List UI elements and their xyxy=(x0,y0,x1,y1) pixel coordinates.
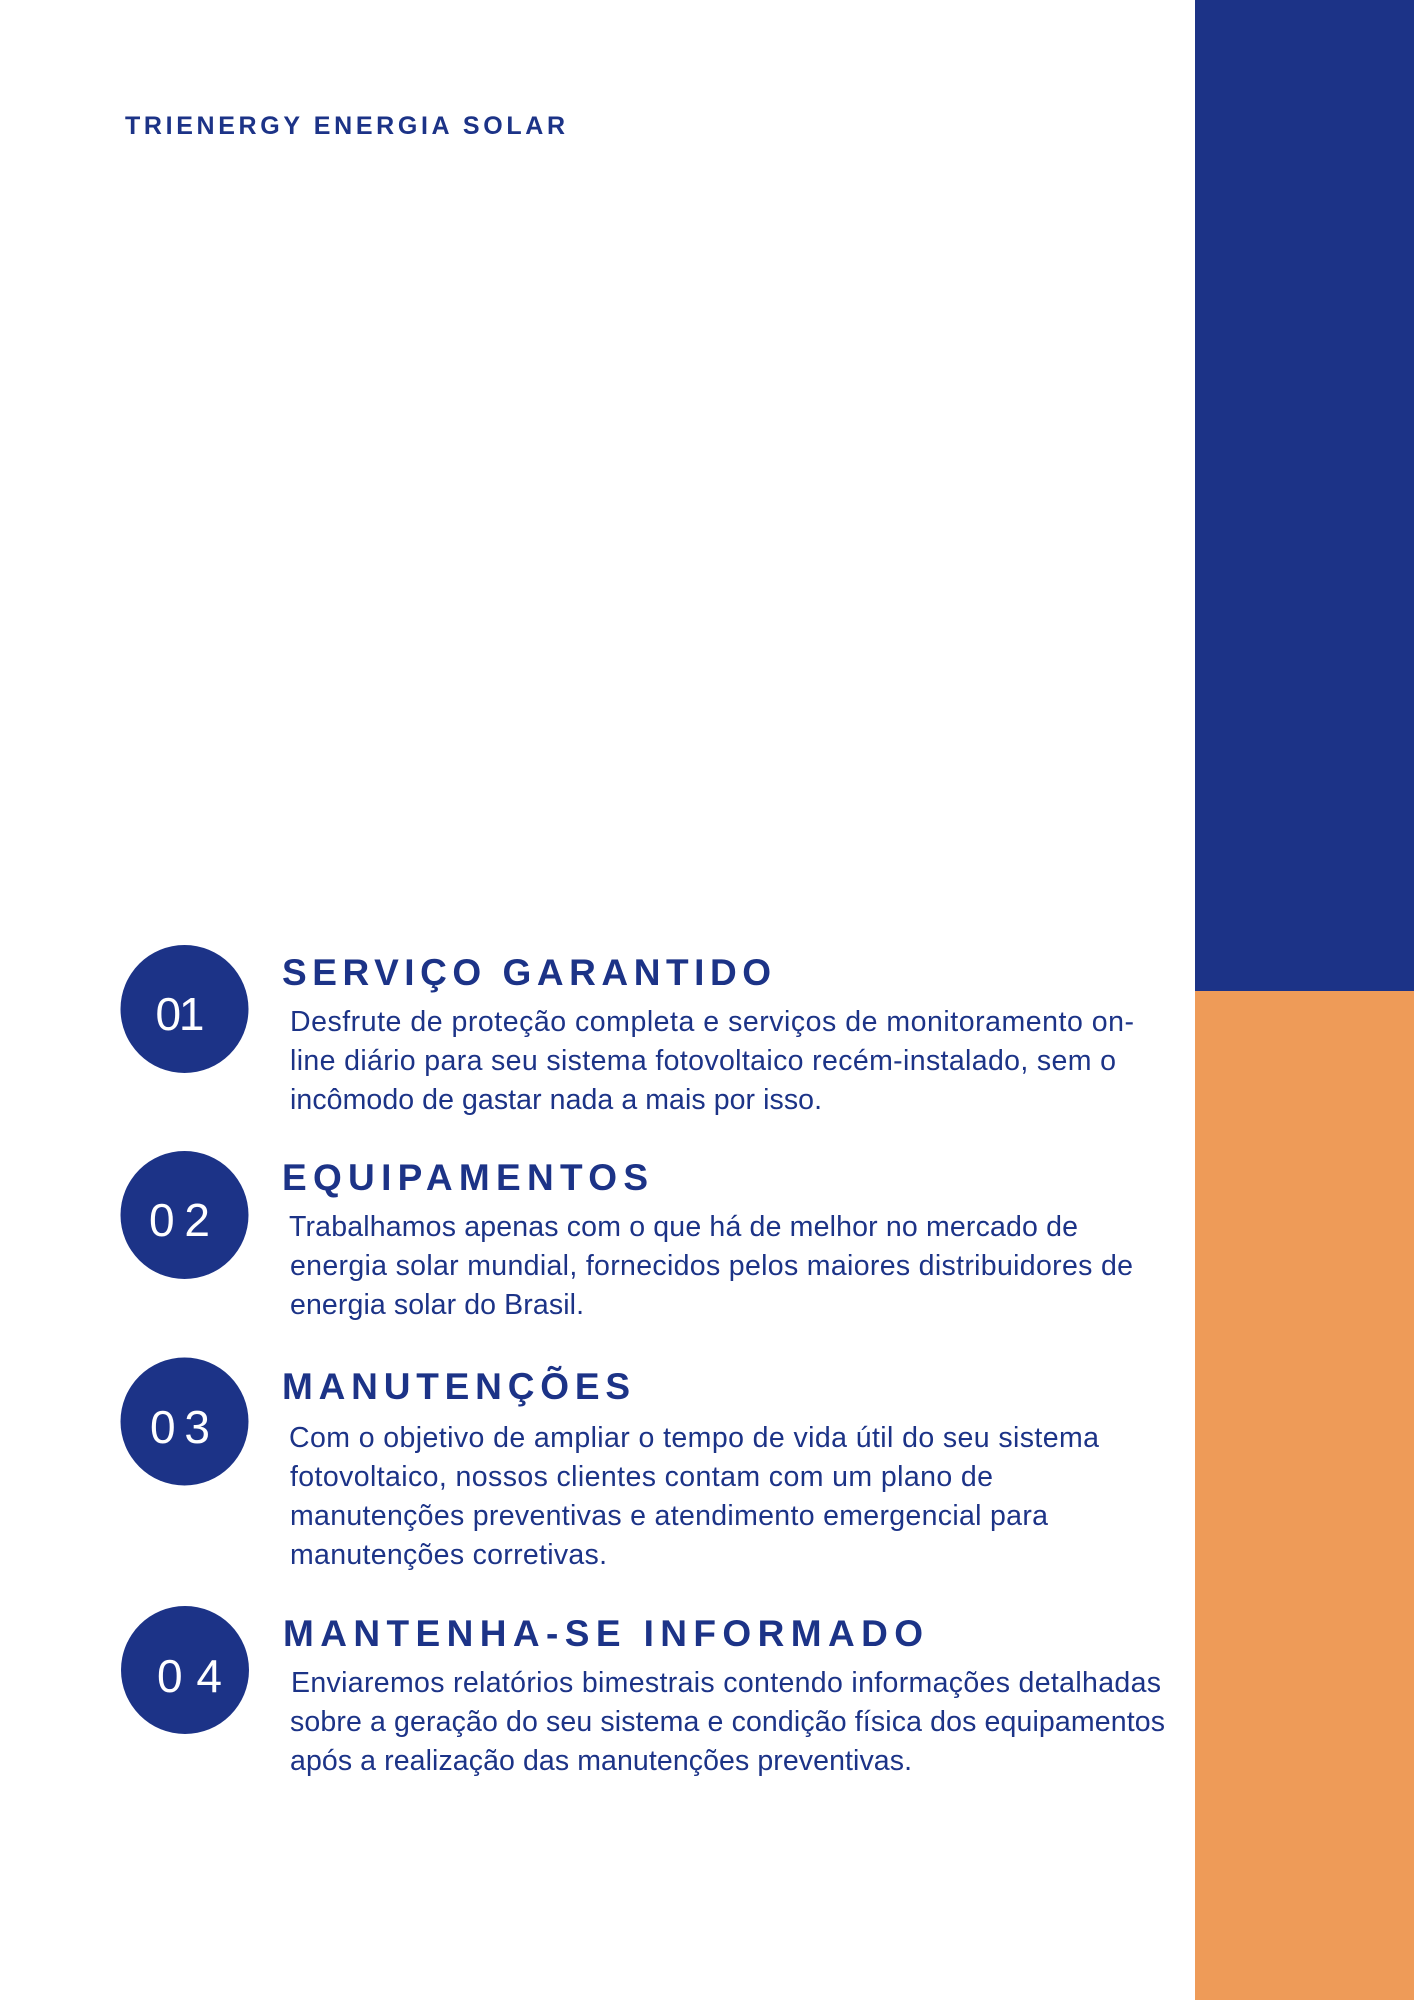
text block: item 02 description xyxy=(289,1211,1133,1321)
panel: item 04 xyxy=(121,1606,1165,1777)
text block: item 03 description: Com o objetivo de ampliar o tempo de vida útil do seu sistema xyxy=(289,1422,1099,1454)
number badge 04: 04 xyxy=(157,1650,222,1702)
heading: equipamentos: EQUIPAMENTOS xyxy=(282,1157,648,1198)
text block: item 02 description: energia solar do Brasil. xyxy=(290,1289,584,1321)
text block: item 01 description: Desfrute de proteção completa e serviços de monitoramento on- xyxy=(290,1006,1134,1038)
number badge 03 xyxy=(120,1358,248,1486)
panel: orange side bar xyxy=(1195,991,1414,2000)
panel: navy side bar xyxy=(1195,0,1414,991)
number badge 04 xyxy=(121,1606,249,1734)
heading: mantenha-se informado: MANTENHA-SE INFORMADO xyxy=(283,1613,923,1654)
text block: item 01 description: line diário para seu sistema fotovoltaico recém-instalado, sem o xyxy=(290,1045,1116,1077)
text block: item 04 description xyxy=(290,1667,1165,1777)
number badge 02: 02 xyxy=(149,1194,210,1246)
text block: item 01 description: incômodo de gastar nada a mais por isso. xyxy=(290,1084,822,1116)
panel: item 01 xyxy=(120,945,1134,1116)
text block: item 04 description: Enviaremos relatórios bimestrais contendo informações detalhadas xyxy=(291,1667,1161,1699)
text block: item 03 description: fotovoltaico, nossos clientes contam com um plano de xyxy=(290,1461,993,1493)
number badge 01: 01 xyxy=(156,988,204,1040)
number badge 02 xyxy=(120,1151,248,1279)
title: TRIENERGY ENERGIA SOLAR xyxy=(125,112,565,140)
panel: item 03 xyxy=(120,1358,1099,1571)
text block: item 03 description xyxy=(289,1422,1099,1571)
panel: item 02 xyxy=(120,1151,1133,1321)
text block: item 02 description: energia solar mundial, fornecidos pelos maiores distribuidores de xyxy=(290,1250,1133,1282)
heading: serviço garantido: SERVIÇO GARANTIDO xyxy=(282,952,771,993)
number badge 01 xyxy=(120,945,248,1073)
text block: item 03 description: manutenções preventivas e atendimento emergencial para xyxy=(290,1500,1048,1532)
text block: item 01 description xyxy=(290,1006,1134,1116)
heading: manutenções: MANUTENÇÕES xyxy=(282,1365,630,1407)
number badge 03: 03 xyxy=(150,1401,210,1453)
text block: item 04 description: após a realização das manutenções preventivas. xyxy=(290,1745,912,1777)
text block: item 04 description: sobre a geração do seu sistema e condição física dos equipamentos xyxy=(290,1706,1165,1738)
text block: item 02 description: Trabalhamos apenas com o que há de melhor no mercado de xyxy=(289,1211,1078,1243)
text block: item 03 description: manutenções corretivas. xyxy=(290,1539,607,1571)
